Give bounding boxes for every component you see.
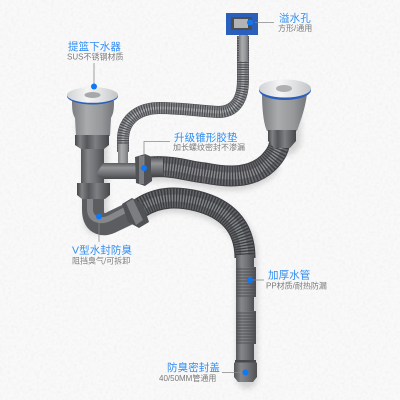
trap union nut [122, 198, 149, 228]
callout: 升级锥形胶垫 [141, 131, 245, 171]
hose: upper corrugated [150, 138, 280, 176]
rim [259, 80, 311, 100]
overflow plate [226, 13, 258, 35]
callout: 溢水孔 [247, 12, 312, 33]
callout: 防臭密封盖: 防臭密封盖 [167, 361, 220, 374]
callout: 升级锥形胶垫: 加长螺纹密封不渗漏 [173, 142, 245, 152]
end cap [234, 360, 257, 382]
callout: 溢水孔: 溢水孔 [279, 12, 311, 24]
trap bend [93, 190, 135, 224]
trap and branch pipe [77, 150, 163, 228]
callout: 升级锥形胶垫: 升级锥形胶垫 [174, 131, 238, 144]
vertical telescopic hose [236, 255, 256, 360]
overflow hose [118, 35, 248, 163]
callout: 加厚水管: 加厚水管 [268, 268, 310, 282]
upper union nut [77, 183, 110, 199]
basket [72, 101, 114, 136]
right strainer [259, 80, 311, 148]
callout: 提篮下水器: 提篮下水器 [68, 40, 121, 53]
left strainer [67, 87, 118, 187]
drain pipe upper [81, 145, 104, 187]
callout: 提篮下水器 [67, 40, 123, 90]
callout: 提篮下水器: SUS不锈钢材质 [67, 52, 123, 62]
soft shadows [92, 104, 286, 378]
hose: lower corrugated long [140, 198, 245, 258]
callout: 溢水孔: 方形/通用 [278, 23, 312, 33]
callout: 防臭密封盖: 40/50MM管通用 [159, 373, 216, 383]
callout: V型水封防臭 [72, 214, 133, 266]
branch nipple [118, 150, 128, 164]
callout: 防臭密封盖 [159, 361, 248, 383]
callout: V型水封防臭: 阻挡臭气/可拆卸 [72, 256, 130, 266]
tail nut [268, 130, 296, 148]
branch union nut [135, 154, 152, 186]
callout: 加厚水管: PP材质/耐热防漏 [266, 280, 327, 290]
callout: 加厚水管 [247, 268, 327, 290]
overflow hose collars [118, 144, 128, 163]
branch tee [97, 163, 140, 179]
rim [67, 88, 118, 104]
basket [262, 94, 307, 131]
callout: V型水封防臭: V型水封防臭 [72, 244, 133, 256]
tail nut [75, 135, 109, 149]
